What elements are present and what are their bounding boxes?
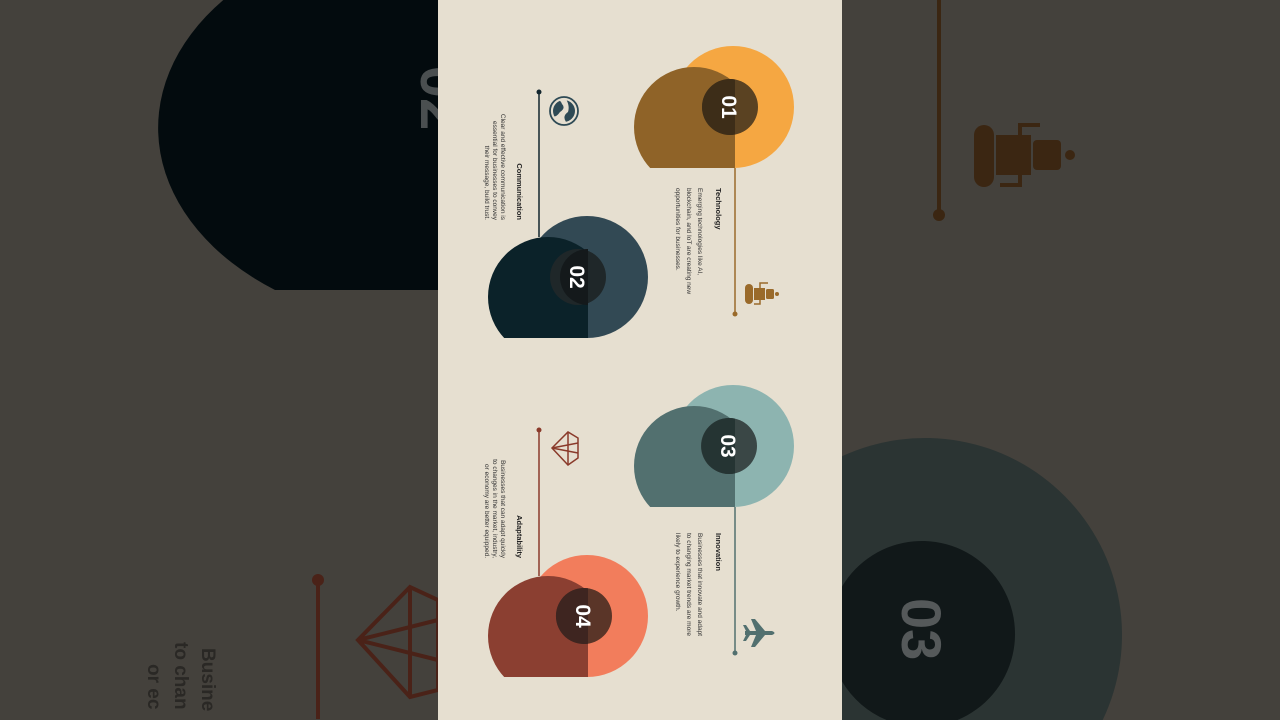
item 01 technology: opportunities for businesses. — [674, 188, 681, 271]
background right blurred: 03 — [890, 598, 953, 660]
item 04 adaptability — [483, 428, 648, 696]
background right blurred — [842, 0, 1280, 720]
item 03 innovation: Innovation — [714, 533, 723, 571]
item 02 communication: Clear and effective communication is — [499, 114, 506, 221]
background left blurred: or ec — [143, 664, 164, 710]
item 02 communication: their message, build trust. — [483, 146, 490, 220]
item 01 technology: Emerging technologies like AI, — [696, 188, 703, 275]
item 02 communication: Communication — [515, 163, 524, 220]
item 02 communication: essential for businesses to convey — [491, 121, 498, 221]
item 03 innovation: 03 — [716, 434, 739, 458]
background left blurred: to chan — [170, 642, 191, 710]
item 02 communication — [483, 90, 648, 357]
item 04 adaptability: or economy are better equipped. — [483, 464, 490, 558]
item 02 communication: 02 — [565, 265, 588, 289]
item 04 adaptability: to changes in the market, industry, — [491, 459, 498, 558]
item 03 innovation: Businesses that innovate and adapt — [696, 533, 703, 636]
item 01 technology: Technology — [714, 188, 723, 230]
item 03 innovation: likely to experience growth. — [674, 533, 681, 612]
background left blurred: 02 — [408, 66, 473, 130]
item 04 adaptability: 04 — [571, 604, 594, 628]
item 03 innovation: to changing market trends are more — [685, 533, 692, 636]
item 01 technology: blockchain, and IoT are creating new — [685, 188, 692, 294]
icon: globe — [550, 97, 578, 125]
item 01 technology — [634, 46, 794, 316]
background left blurred: Busine — [197, 648, 218, 711]
main panel — [438, 0, 842, 720]
item 04 adaptability: Businesses that can adapt quickly — [499, 460, 506, 559]
item 04 adaptability: Adaptability — [515, 515, 524, 559]
item 01 technology: 01 — [717, 95, 740, 119]
background left blurred — [0, 0, 473, 720]
item 03 innovation — [634, 385, 794, 656]
icon: plane — [743, 619, 774, 647]
icon: robot — [745, 283, 779, 304]
icon: diamond — [552, 432, 578, 465]
